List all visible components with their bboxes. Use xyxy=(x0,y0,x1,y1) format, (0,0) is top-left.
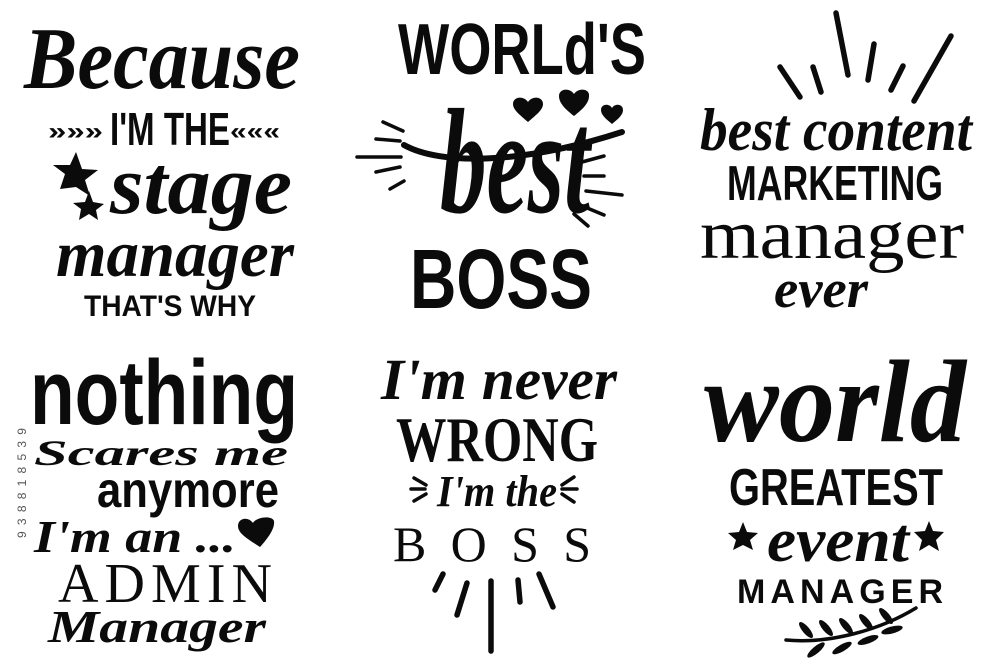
heading: nothing: nothing xyxy=(30,342,298,444)
icon: left chevrons: »»» xyxy=(48,118,103,145)
text: admin: ADMIN xyxy=(58,553,272,615)
icon: laurel branch xyxy=(786,606,916,660)
icon: flourish xyxy=(404,132,622,159)
text: I'm never: I'm never xyxy=(380,347,617,412)
icon: right rays xyxy=(574,156,622,226)
icon: small star xyxy=(73,191,104,220)
text: scares me: Scares me xyxy=(34,433,288,473)
text: I'm the: I'm the xyxy=(436,467,557,516)
text: anymore: anymore xyxy=(97,462,279,518)
text: manager: MANAGER xyxy=(737,573,943,611)
icon: sunburst rays xyxy=(780,13,951,101)
icon: right leaf rays xyxy=(562,477,577,502)
icon: right chevrons: ««« xyxy=(230,118,280,145)
icon: left leaf rays xyxy=(411,478,426,501)
text: greatest: GREATEST xyxy=(729,459,943,517)
text: ever: ever xyxy=(774,259,869,319)
text: boss: BOSS xyxy=(393,516,591,572)
panel: never wrong quote xyxy=(380,347,617,651)
text: that's why: THAT'S WHY xyxy=(84,290,256,323)
panel: world greatest event manager quote xyxy=(704,336,968,660)
icon: hearts xyxy=(513,90,623,124)
panel: stage manager quote xyxy=(23,11,300,323)
text: I'm the: I'M THE xyxy=(110,103,230,155)
text: best content: best content xyxy=(700,97,974,163)
text: manager: manager xyxy=(700,197,964,274)
text: best: best xyxy=(440,79,593,245)
icon: left star xyxy=(728,522,758,550)
text: manager: manager xyxy=(56,218,295,291)
heading: World's: WORLd'S xyxy=(398,10,646,90)
watermark id: 938818539 xyxy=(15,428,29,538)
text: manager: Manager xyxy=(47,601,267,652)
text: boss: BOSS xyxy=(410,232,592,326)
icon: heart xyxy=(238,517,274,547)
panel: world's best boss quote xyxy=(357,10,646,326)
icon: large star xyxy=(53,152,98,196)
heading: Because: Because xyxy=(23,11,300,108)
heading: world: world xyxy=(704,336,968,467)
icon: right star xyxy=(914,521,944,551)
text: I'm an: I'm an ... xyxy=(33,511,236,562)
panel: content marketing manager quote xyxy=(700,13,974,319)
panel: nothing scares me quote xyxy=(30,342,298,652)
icon: left rays xyxy=(357,122,404,189)
text: stage: stage xyxy=(109,139,292,232)
text: event: event xyxy=(767,507,911,575)
heading: wrong: WRONG xyxy=(396,404,598,475)
icon: burst rays xyxy=(435,574,553,651)
